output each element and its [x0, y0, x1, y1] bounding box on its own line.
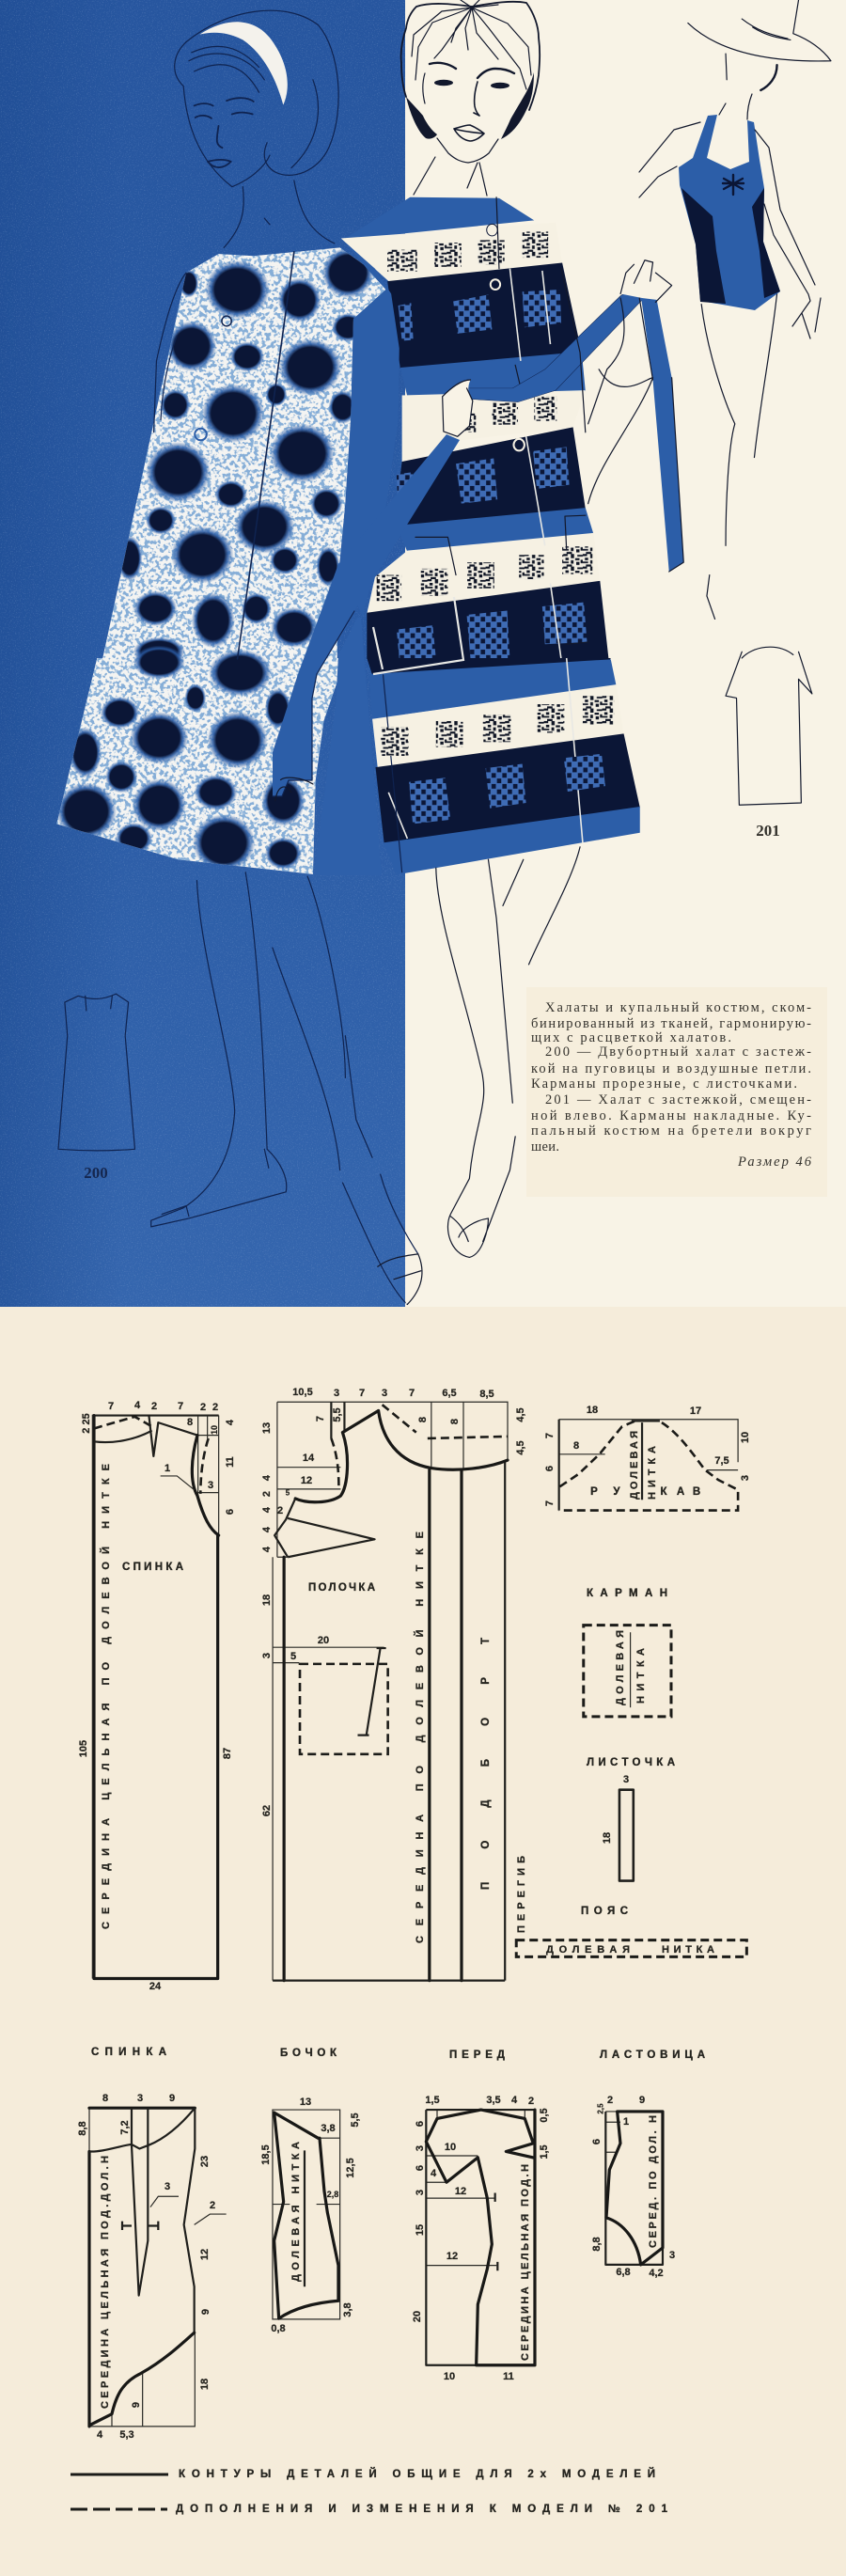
pattern piece: back panel, model 201: 9: [169, 2093, 175, 2104]
pattern piece: pocket (карман): ДОЛЕВАЯ: [615, 1630, 626, 1705]
pattern piece: sleeve (рукав): ДОЛЕВАЯ: [629, 1431, 640, 1500]
pattern piece: sleeve (рукав): 10: [740, 1432, 751, 1443]
pattern piece: gusset (ластовица): 9: [639, 2095, 645, 2106]
pattern piece: welt (листочка): 3: [623, 1774, 629, 1785]
pattern piece: front (полочка): 5: [290, 1651, 296, 1662]
pattern piece: side panel (бочок): [260, 2048, 361, 2334]
pattern piece: front (полочка): 14: [303, 1453, 315, 1464]
pattern piece: back (спинка): 2: [200, 1402, 206, 1413]
pattern piece: back panel, model 201: 4: [97, 2429, 103, 2441]
pattern piece: front (полочка): 7: [409, 1388, 415, 1399]
pattern piece: gusset (ластовица): ЛАСТОВИЦА: [600, 2050, 705, 2061]
pattern piece: front panel (перед): ПЕРЕД: [449, 2050, 505, 2061]
pattern piece: front panel (перед): 11: [503, 2371, 514, 2382]
pattern piece: front (полочка): 3: [334, 1388, 339, 1399]
sketch: robe 200 flat: [58, 994, 134, 1151]
figure: woman in dotted robe 200: [47, 0, 831, 1304]
sketch: robe 201 flat: [726, 652, 812, 805]
pattern piece: back panel, model 201: 23: [199, 2156, 211, 2167]
pattern piece: front (полочка): ПОДБОРТ: [480, 1638, 492, 1890]
pattern piece: front panel (перед): 10: [444, 2371, 455, 2382]
pattern piece: front (полочка): 8: [417, 1417, 429, 1422]
right figure sleeve lines: [561, 269, 653, 504]
pattern piece: front panel (перед): 6: [415, 2121, 426, 2127]
pattern piece: back (спинка): [78, 1400, 236, 1992]
legend: solid line: КОНТУРЫ ДЕТАЛЕЙ ОБЩИЕ ДЛЯ 2х МОДЕЛЕЙ: [179, 2468, 655, 2480]
pattern piece: pocket (карман): [584, 1588, 671, 1717]
label 201: 201: [756, 822, 780, 840]
pattern piece: sleeve (рукав): НИТКА: [647, 1446, 658, 1500]
pattern piece: welt (листочка): 18: [602, 1832, 613, 1844]
text panel: description: [526, 987, 827, 1197]
robe 201 upper stripes: [341, 197, 608, 659]
pattern piece: front panel (перед): 12: [455, 2186, 466, 2197]
pattern piece: gusset (ластовица): 6,8: [616, 2267, 631, 2278]
pattern piece: back (спинка): 87: [222, 1748, 233, 1759]
pattern piece: back (спинка): 105: [78, 1740, 89, 1757]
left figure head: [175, 10, 338, 187]
buttons and seams: [415, 197, 588, 659]
text panel: description: 201 — Халат с застежкой, смещен-: [545, 1092, 811, 1107]
pattern piece: back panel, model 201: 5,3: [119, 2429, 134, 2441]
pattern piece: back (спинка): 11: [225, 1456, 236, 1468]
pattern piece: gusset (ластовица): 8,8: [591, 2237, 603, 2252]
pattern piece: side panel (бочок): 13: [300, 2097, 311, 2108]
pattern piece: front (полочка): 2: [277, 1505, 283, 1516]
pattern piece: front panel (перед): 4: [511, 2095, 518, 2106]
left blue background: [0, 0, 405, 1307]
pattern piece: side panel (бочок): БОЧОК: [280, 2048, 337, 2059]
pattern piece: front (полочка): 10,5: [292, 1387, 313, 1398]
pattern piece: front panel (перед): 0,5: [539, 2108, 550, 2123]
pattern piece: side panel (бочок): 3,8: [342, 2302, 353, 2317]
right figure neck: [414, 157, 487, 196]
text panel: description: Карманы прорезные, с листочками.: [531, 1076, 797, 1092]
belt in blue: [464, 283, 683, 572]
pattern piece: front panel (перед): 6: [415, 2165, 426, 2171]
pattern piece: side panel (бочок): 2,8: [327, 2190, 338, 2199]
pattern piece: belt (пояс): НИТКА: [662, 1944, 714, 1956]
pattern piece: front (полочка): 18: [261, 1594, 273, 1606]
pattern piece: front panel (перед): 20: [412, 2311, 423, 2322]
pattern piece: front (полочка): ПОЛОЧКА: [308, 1582, 375, 1594]
text panel: description: бинированный из тканей, гармонирую-: [531, 1016, 811, 1031]
robe 201 lower stripes: [367, 658, 640, 874]
pattern piece: front panel (перед): 15: [415, 2224, 426, 2236]
hat and legs: [688, 0, 831, 658]
swimsuit body: [679, 115, 780, 310]
pattern piece: front (полочка): 62: [261, 1805, 273, 1816]
pattern piece: back (спинка): 3: [208, 1480, 213, 1491]
pattern piece: front panel (перед): 3,5: [486, 2095, 501, 2106]
pocket edge, white line: [373, 597, 463, 674]
text panel: description: пальный костюм на бретели вокруг: [531, 1123, 811, 1139]
pattern piece: back (спинка): 2: [151, 1401, 157, 1412]
pattern piece: gusset (ластовица): [591, 2050, 705, 2279]
pattern piece: sleeve (рукав): 6: [544, 1466, 556, 1471]
pattern piece: front (полочка): 12: [301, 1475, 312, 1486]
swimsuit navy side panels: [682, 188, 780, 304]
pattern piece: back panel, model 201: 7,2: [119, 2120, 131, 2135]
pattern piece: gusset (ластовица): 1: [623, 2116, 629, 2128]
legend: dashed line: ДОПОЛНЕНИЯ И ИЗМЕНЕНИЯ К МОДЕЛИ № 201: [176, 2504, 668, 2515]
pattern piece: front (полочка): 3: [261, 1653, 273, 1658]
pattern piece: back (спинка): 8: [187, 1417, 193, 1428]
pattern piece: pocket (карман): КАРМАН: [587, 1588, 667, 1599]
pattern piece: belt (пояс): [516, 1906, 746, 1956]
pattern piece: front (полочка): 13: [261, 1422, 273, 1434]
pattern piece: gusset (ластовица): 2: [607, 2095, 613, 2106]
navy band check squares: [397, 290, 588, 659]
pattern piece: front panel (перед): [412, 2050, 550, 2382]
robe 200 dots lower: [56, 646, 305, 872]
pattern piece: sleeve (рукав): 7: [544, 1500, 556, 1506]
text panel: description: шеи.: [531, 1139, 559, 1154]
pattern piece: front panel (перед): 1,5: [539, 2144, 550, 2160]
pattern piece: side panel (бочок): 18,5: [260, 2144, 272, 2165]
pattern piece: side panel (бочок): 5,5: [350, 2113, 361, 2128]
pattern piece: sleeve (рукав): 3: [740, 1475, 751, 1481]
robe 200 placket: [238, 252, 294, 659]
pattern piece: front (полочка): 7: [315, 1416, 326, 1422]
hands: [443, 260, 672, 436]
lower hand: [275, 778, 313, 801]
pattern piece: front (полочка): [261, 1387, 527, 1981]
pattern piece: front (полочка): 7: [359, 1388, 365, 1399]
text panel: description: кой на пуговицы и воздушные петли.: [531, 1061, 811, 1076]
pattern piece: front panel (перед): 3: [415, 2145, 426, 2151]
pattern piece: sleeve (рукав): 7: [544, 1433, 556, 1438]
left figure legs: [151, 872, 418, 1304]
pattern piece: pocket (карман): НИТКА: [635, 1648, 647, 1704]
pattern piece: belt (пояс): ПОЯС: [581, 1906, 628, 1917]
right figure legs: [436, 847, 580, 1257]
pattern piece: front (полочка): 2: [261, 1491, 273, 1497]
pattern piece: front (полочка): 4: [261, 1474, 273, 1481]
pattern piece: back (спинка): 10: [210, 1425, 219, 1435]
pattern piece: back (спинка): 4: [134, 1400, 141, 1411]
pattern piece: welt (листочка): ЛИСТОЧКА: [587, 1757, 675, 1768]
pattern piece: front (полочка): СЕРЕДИНА ПО ДОЛЕВОЙ НИТКЕ: [414, 1531, 426, 1943]
pattern piece: front (полочка): 3: [382, 1388, 387, 1399]
text panel: description: щих с расцветкой халатов.: [531, 1030, 731, 1045]
pattern piece: back (спинка): СПИНКА: [122, 1562, 183, 1573]
pattern piece: front (полочка): 4,5: [515, 1440, 526, 1455]
pattern piece: gusset (ластовица): 3: [669, 2250, 675, 2261]
pattern piece: back panel, model 201: 3: [164, 2181, 170, 2192]
figure: woman in striped robe 201: [341, 197, 640, 874]
pattern piece: front (полочка): ПЕРЕГИБ: [516, 1856, 527, 1933]
swimsuit figure: [639, 0, 831, 658]
pattern piece: front (полочка): 6,5: [442, 1388, 457, 1399]
pattern piece: back panel, model 201: 3: [137, 2093, 143, 2104]
pattern piece: back panel, model 201: 9: [131, 2402, 142, 2408]
pattern piece: back panel, model 201: 8: [102, 2093, 108, 2104]
pattern piece: front panel (перед): 10: [445, 2142, 456, 2153]
pattern piece: back (спинка): 2: [212, 1402, 218, 1413]
text panel: description: 200 — Двубортный халат с застеж-: [545, 1045, 811, 1060]
left figure neck and arm lines: [154, 181, 335, 432]
pattern piece: front panel (перед): 4: [431, 2168, 437, 2179]
pattern piece: front (полочка): 4: [261, 1506, 273, 1513]
pattern piece: front (полочка): 4: [261, 1546, 273, 1552]
pattern piece: front panel (перед): СЕРЕДИНА ЦЕЛЬНАЯ ПОД.Н: [520, 2164, 531, 2361]
pattern piece: sleeve (рукав): К: [660, 1486, 667, 1498]
pattern piece: back (спинка): 7: [178, 1401, 183, 1412]
pattern piece: back (спинка): 7: [108, 1401, 114, 1412]
pattern piece: front panel (перед): 2: [528, 2096, 534, 2107]
belt end over dotted robe: [273, 434, 460, 796]
pattern piece: sleeve (рукав): 18: [587, 1405, 598, 1416]
pattern piece: back (спинка): СЕРЕДИНА ЦЕЛЬНАЯ ПО ДОЛЕВОЙ НИТКЕ: [100, 1464, 112, 1929]
pattern piece: back (спинка): 24: [149, 1981, 162, 1992]
pattern piece: gusset (ластовица): 2,5: [596, 2103, 605, 2114]
pattern piece: back panel, model 201: 18: [199, 2379, 211, 2390]
pattern piece: back panel, model 201: 2: [210, 2200, 215, 2211]
pattern piece: back (спинка): 4: [225, 1419, 236, 1425]
right cream background: [404, 0, 846, 1307]
pattern piece: sleeve (рукав): 17: [690, 1406, 701, 1417]
text panel: description: Размер 46: [737, 1154, 812, 1170]
pattern piece: back panel, model 201: СЕРЕДИНА ЦЕЛЬНАЯ ПОД.ДОЛ.Н: [100, 2156, 111, 2409]
label 200: 200: [84, 1164, 108, 1182]
right figure head: [401, 0, 540, 163]
pattern piece: back (спинка): 6: [225, 1509, 236, 1515]
pattern piece: sleeve (рукав): А: [677, 1486, 684, 1498]
text panel: description: ной влево. Карманы накладные. Ку-: [531, 1108, 811, 1123]
pattern piece: back panel, model 201: 9: [200, 2309, 212, 2315]
pattern piece: back panel, model 201: СПИНКА: [91, 2047, 166, 2058]
pattern piece: sleeve (рукав): Р: [590, 1486, 598, 1498]
pattern piece: gusset (ластовица): 6: [591, 2139, 603, 2144]
pattern piece: front (полочка): 4,5: [515, 1407, 526, 1422]
pattern piece: sleeve (рукав): В: [693, 1486, 700, 1498]
pattern piece: front panel (перед): 3: [415, 2190, 426, 2195]
pattern piece: sleeve (рукав): 7,5: [714, 1455, 729, 1467]
pattern piece: front (полочка): 20: [318, 1635, 329, 1646]
pattern piece: front (полочка): 5,5: [332, 1407, 343, 1422]
pattern piece: belt (пояс): ДОЛЕВАЯ: [546, 1944, 630, 1956]
pattern piece: front (полочка): 4: [261, 1526, 273, 1532]
pattern piece: sleeve (рукав): У: [613, 1486, 620, 1498]
white band print squares: [377, 231, 592, 601]
swimsuit star motif: [723, 175, 744, 195]
text panel: description: Халаты и купальный костюм, ском-: [545, 1000, 811, 1015]
pattern piece: back panel, model 201: [77, 2047, 227, 2441]
pattern piece: gusset (ластовица): СЕРЕД. ПО ДОЛ. Н: [648, 2115, 659, 2248]
pattern piece: gusset (ластовица): 4,2: [649, 2268, 664, 2279]
pattern piece: sleeve (рукав): 8: [573, 1440, 579, 1452]
robe 200 speckled fabric: [56, 247, 385, 874]
pattern piece: front (полочка): 8,5: [479, 1389, 494, 1400]
pattern piece: front (полочка): 5: [286, 1489, 290, 1497]
pattern piece: side panel (бочок): 0,8: [271, 2323, 286, 2334]
pattern piece: front panel (перед): 1,5: [425, 2095, 440, 2106]
robe 200 dots upper: [117, 247, 374, 666]
pattern piece: side panel (бочок): 3,8: [321, 2123, 336, 2134]
pattern piece: back panel, model 201: 8,8: [77, 2121, 88, 2136]
swimsuit figure body lines: [639, 94, 821, 338]
pattern piece: side panel (бочок): 12,5: [345, 2158, 356, 2178]
pattern piece: welt (листочка): [587, 1757, 675, 1881]
pattern piece: sleeve (рукав): [544, 1405, 751, 1511]
pattern piece: front (полочка): 8: [449, 1419, 461, 1424]
pattern piece: back (спинка): 2 25: [81, 1413, 92, 1434]
blue arm, upper part: [340, 243, 400, 617]
pattern piece: front panel (перед): 12: [446, 2251, 458, 2262]
blue arm, lower part: [314, 618, 382, 875]
pattern piece: back (спинка): 1: [164, 1463, 170, 1474]
pattern piece: back panel, model 201: 12: [199, 2249, 211, 2260]
pattern piece: side panel (бочок): ДОЛЕВАЯ НИТКА: [290, 2142, 302, 2282]
